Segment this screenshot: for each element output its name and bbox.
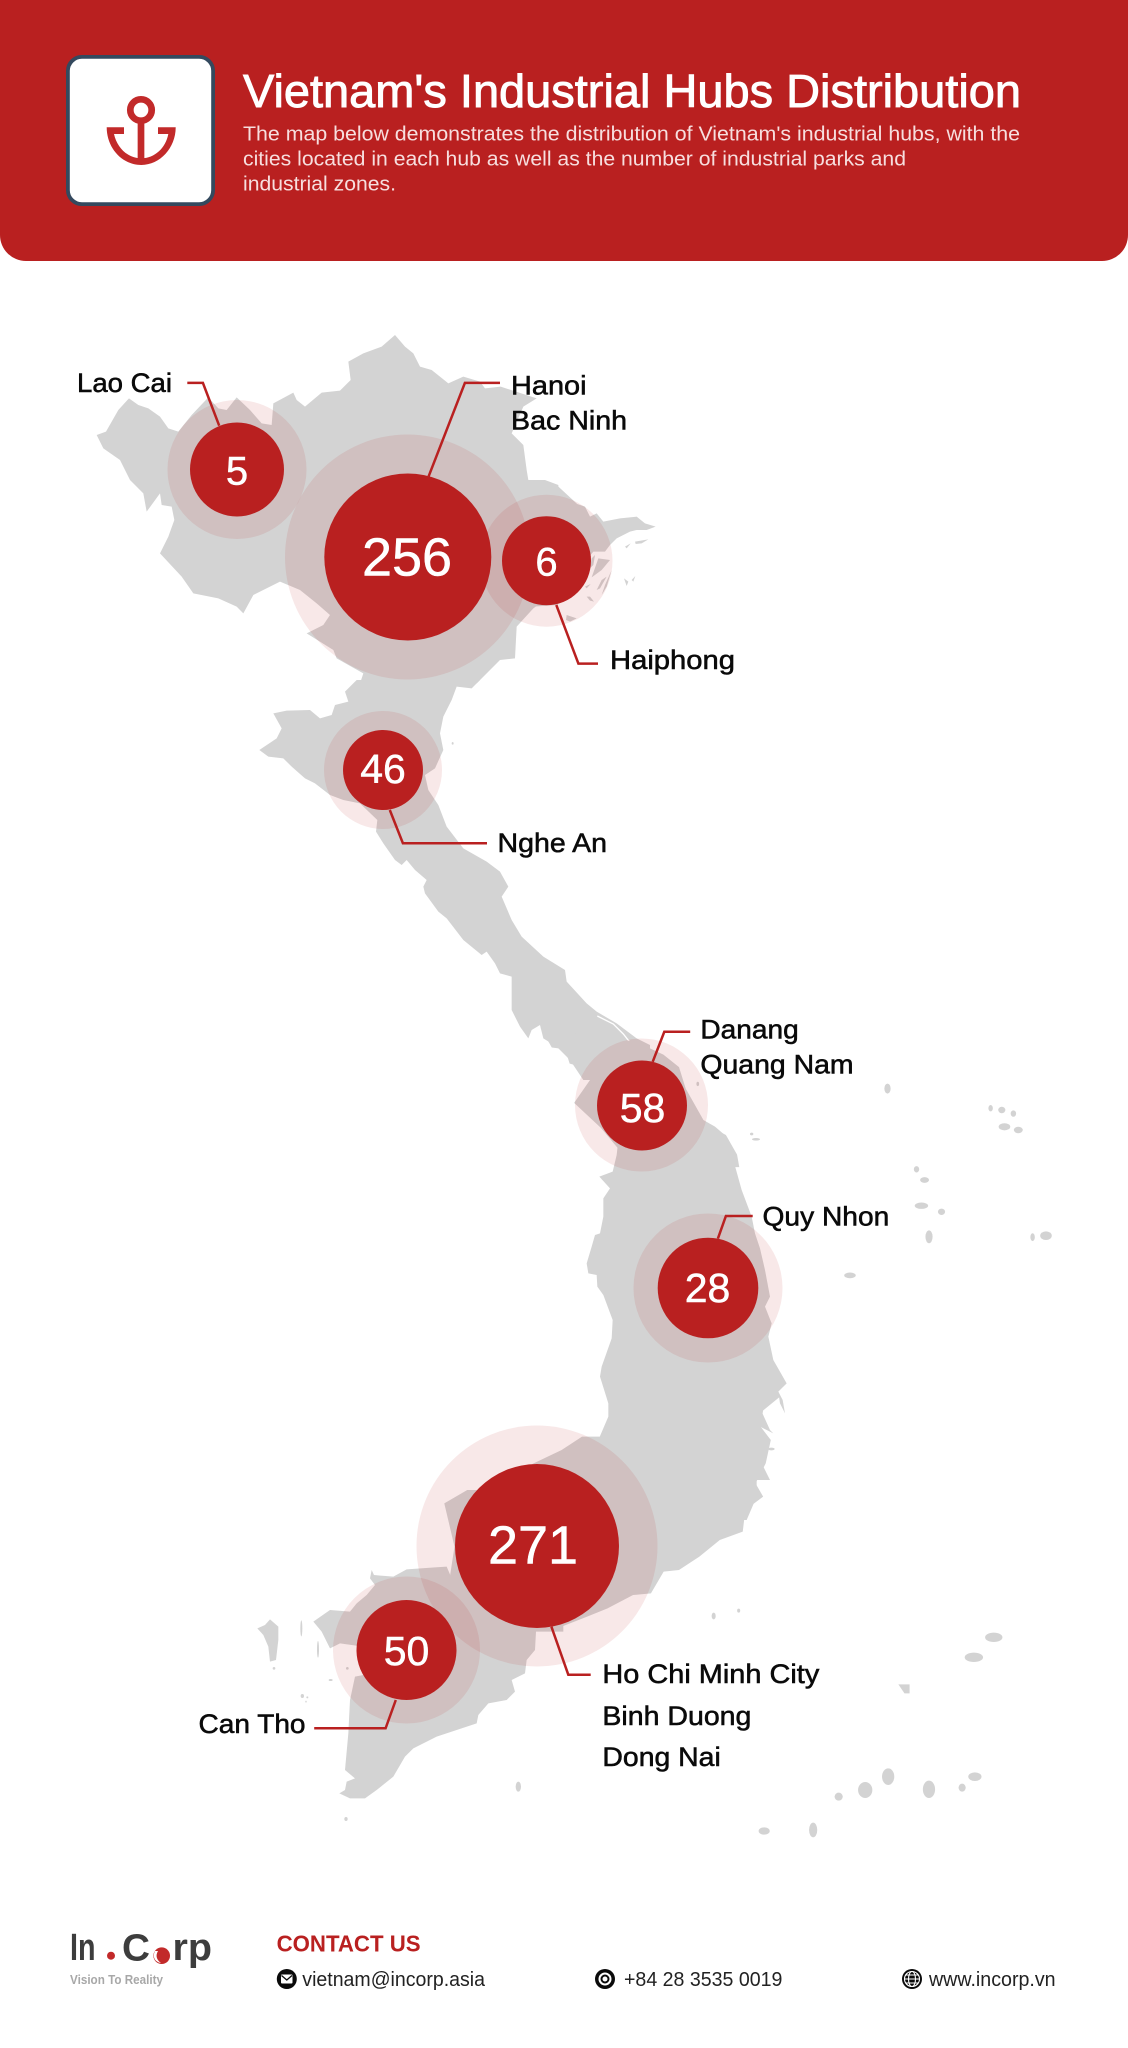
hub: Hanoi, Bac Ninh: Hanoi bbox=[511, 370, 586, 400]
hub: Lao Cai: 5 bbox=[226, 449, 248, 493]
logo: InCorp: In bbox=[70, 1927, 96, 1969]
hub: Lao Cai bbox=[77, 368, 284, 516]
contact: website: www.incorp.vn bbox=[928, 1969, 1056, 1991]
hub: Hanoi, Bac Ninh bbox=[324, 370, 627, 640]
logo: InCorp: C bbox=[122, 1928, 150, 1970]
contact: phone: +84 28 3535 0019 bbox=[624, 1969, 782, 1991]
hub: Ho Chi Minh City, Binh Duong, Dong Nai: Ho Chi Minh City bbox=[602, 1659, 820, 1689]
title: Vietnam's Industrial Hubs Distribution bbox=[243, 65, 1021, 117]
description: The map below demonstrates the distribution of Vietnam's industrial hubs, with the bbox=[243, 123, 1020, 146]
hub: Nghe An: 46 bbox=[360, 746, 406, 792]
hub: Danang, Quang Nam: Danang bbox=[700, 1015, 799, 1045]
hub: Haiphong: Haiphong bbox=[610, 645, 735, 675]
hub: Ho Chi Minh City, Binh Duong, Dong Nai bbox=[455, 1464, 820, 1772]
hub: Haiphong bbox=[502, 516, 735, 675]
translucent hub rings bbox=[168, 400, 782, 1724]
hub: Nghe An: Nghe An bbox=[498, 828, 607, 858]
hub: Hanoi, Bac Ninh: Bac Ninh bbox=[511, 406, 627, 436]
footer bbox=[70, 1927, 1056, 1991]
header banner bbox=[0, 0, 1128, 261]
hub: Ho Chi Minh City, Binh Duong, Dong Nai: 271 bbox=[488, 1515, 578, 1575]
hub: Danang, Quang Nam: Quang Nam bbox=[700, 1050, 854, 1080]
hub: Hanoi, Bac Ninh: 256 bbox=[362, 527, 452, 587]
map of Vietnam bbox=[97, 335, 1052, 1837]
logo: InCorp: Vision To Reality bbox=[70, 1972, 164, 1987]
hub: Quy Nhon: 28 bbox=[685, 1265, 730, 1311]
description: cities located in each hub as well as the number of industrial parks and bbox=[243, 148, 906, 171]
hub: Ho Chi Minh City, Binh Duong, Dong Nai: Binh Duong bbox=[602, 1701, 751, 1731]
hub: Danang, Quang Nam bbox=[597, 1015, 854, 1150]
contact heading: CONTACT US bbox=[277, 1931, 421, 1957]
hub: Lao Cai: Lao Cai bbox=[77, 368, 172, 398]
contact: email: vietnam@incorp.asia bbox=[302, 1969, 486, 1991]
logo: InCorp bbox=[70, 1927, 212, 1987]
hub: Quy Nhon bbox=[658, 1202, 889, 1338]
hub: Ho Chi Minh City, Binh Duong, Dong Nai: Dong Nai bbox=[602, 1742, 721, 1772]
hub: Quy Nhon: Quy Nhon bbox=[762, 1202, 889, 1232]
hub: Can Tho: 50 bbox=[384, 1628, 429, 1674]
description bbox=[243, 123, 1020, 196]
hub: Danang, Quang Nam: 58 bbox=[620, 1085, 665, 1131]
hub: Haiphong: 6 bbox=[535, 540, 558, 584]
icon: anchor card bbox=[68, 57, 213, 204]
description: industrial zones. bbox=[243, 173, 396, 196]
hub: Nghe An bbox=[343, 730, 607, 858]
hub: Can Tho bbox=[198, 1600, 456, 1739]
logo: InCorp: rp bbox=[172, 1927, 212, 1969]
hub: Can Tho: Can Tho bbox=[198, 1709, 306, 1739]
